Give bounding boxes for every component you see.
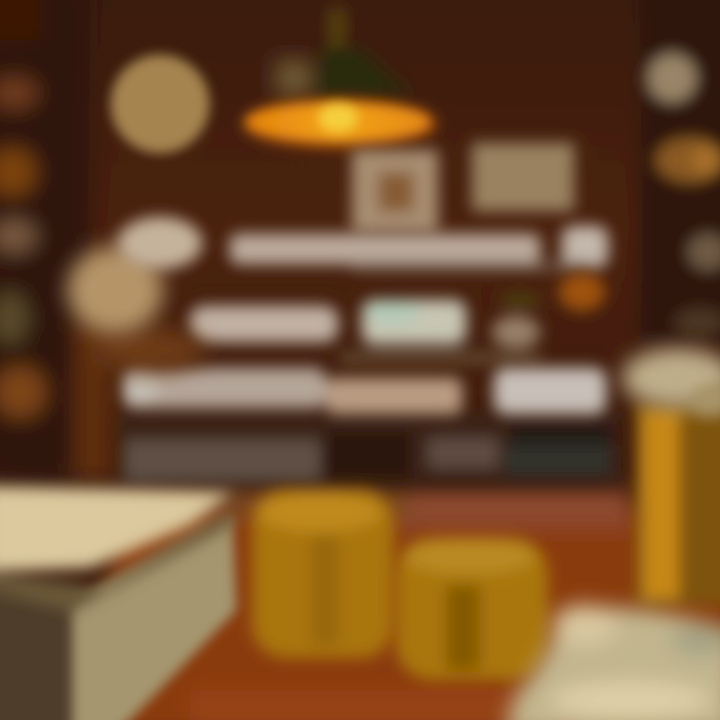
- icon: pendant lamp: [244, 8, 436, 148]
- floor: [110, 488, 720, 720]
- pouf: left mustard: [252, 490, 394, 658]
- panel: right bookshelf: [640, 0, 720, 345]
- icon: round wall plate: [111, 55, 209, 153]
- figure: cream draped lamp or plant at left: [67, 217, 205, 480]
- cream blanket at bottom right: [505, 605, 720, 720]
- back wall: [0, 0, 720, 520]
- panel: white shelf row 3: [122, 365, 606, 414]
- framed picture: centre: [352, 150, 438, 232]
- panel: left bookshelf: [0, 0, 90, 480]
- panel: lower dark console: [115, 412, 620, 486]
- framed picture: right: [472, 143, 574, 211]
- pouf: right mustard: [396, 538, 548, 680]
- panel: white shelf row 1: [230, 226, 608, 272]
- storage box: cream ottoman at left: [0, 486, 236, 720]
- panel: white shelf row 2: [190, 273, 605, 364]
- armchair at right: [622, 348, 720, 605]
